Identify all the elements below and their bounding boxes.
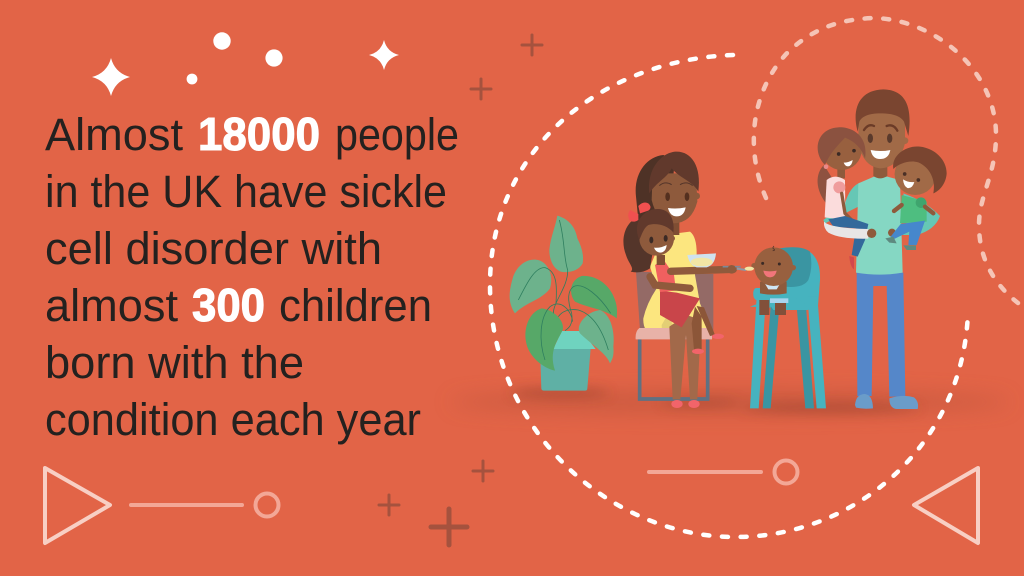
right triangle [914, 468, 978, 543]
headline text: condition each year [45, 394, 421, 445]
boy on father's arm [885, 146, 947, 250]
pale dashed arc [754, 18, 1018, 303]
large white dashed arc [490, 55, 968, 537]
father's shirt [856, 177, 903, 275]
father's trousers [857, 273, 905, 397]
headline text: almost [45, 280, 178, 331]
daughter's arms [650, 269, 733, 288]
father's shoes [855, 394, 918, 409]
father's head [856, 89, 910, 168]
hair bow [628, 202, 650, 222]
left play triangle with line and ring [45, 468, 278, 543]
spoon [737, 269, 746, 270]
leaves [510, 216, 617, 371]
high chair and baby [727, 246, 826, 408]
bowl [687, 253, 716, 267]
chair back [636, 272, 713, 331]
back arm [890, 193, 940, 235]
mother's legs [669, 315, 701, 399]
chair seat [636, 328, 712, 339]
right line and ring [649, 460, 798, 484]
tray [753, 288, 808, 310]
headline text: 18000 [198, 108, 320, 160]
front legs [750, 297, 826, 408]
daughter's red dress [655, 259, 700, 327]
chair back [750, 247, 820, 310]
baby [751, 246, 796, 315]
decorative sparkles and dots [92, 32, 399, 96]
spoon handle [723, 264, 741, 269]
father with two children [818, 89, 947, 409]
headline text: 300 [192, 279, 265, 331]
mother's head [636, 152, 700, 235]
mother's yellow dress [643, 232, 712, 336]
rear legs [763, 307, 814, 408]
mother's shoes [671, 400, 700, 408]
daughter's leg and shoes [692, 306, 724, 354]
headline text: children [279, 280, 432, 331]
headline text: born with the [45, 337, 304, 388]
icon: potted plant [510, 216, 617, 391]
headline text [45, 108, 459, 445]
stems [518, 220, 611, 360]
headline text: cell disorder with [45, 223, 382, 274]
father's neck [873, 163, 887, 178]
headline text: people [335, 109, 459, 160]
chair frame [640, 339, 708, 399]
headline text: Almost [45, 109, 183, 160]
mother and daughter on chair [636, 232, 741, 408]
girl on father's arm [818, 127, 868, 269]
father's front arm (white sleeve) [824, 222, 868, 239]
ground shadow [450, 389, 1010, 413]
decorative plus signs [379, 35, 542, 545]
daughter's head [623, 202, 675, 272]
pot [540, 331, 596, 391]
headline text: in the UK have sickle [45, 166, 447, 217]
